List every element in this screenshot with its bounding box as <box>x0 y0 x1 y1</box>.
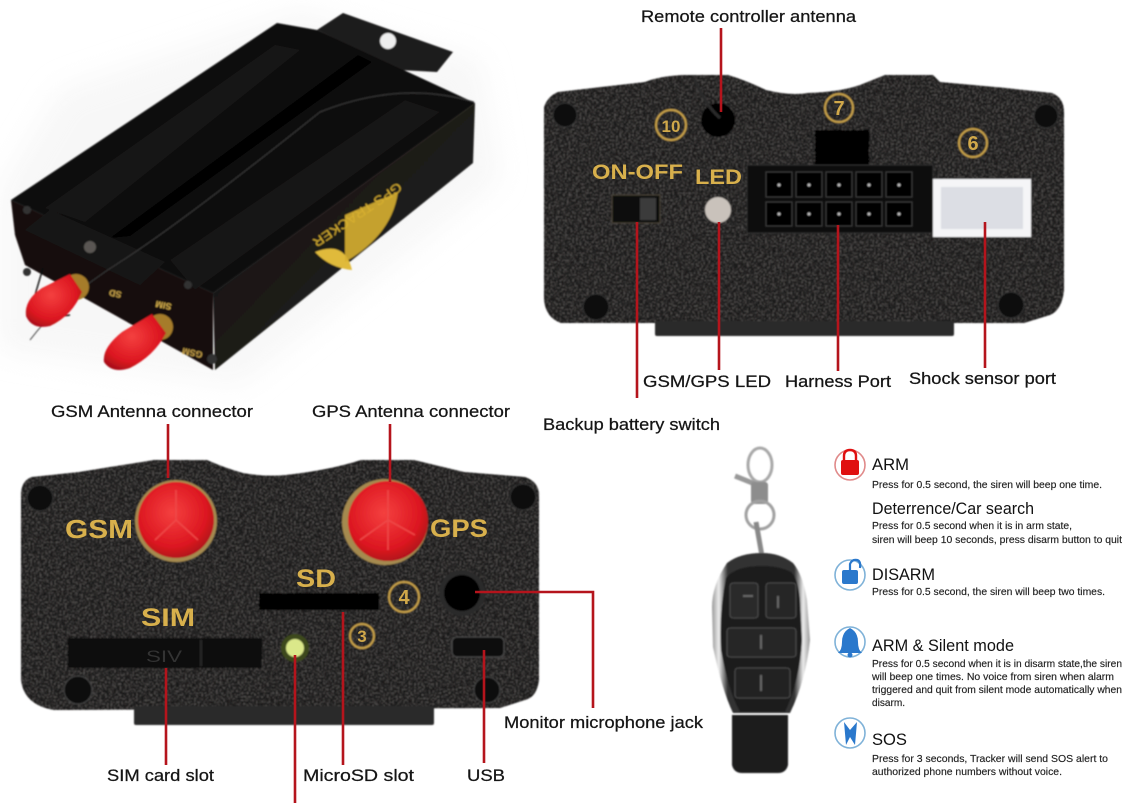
legend: Deterrence/Car search: siren will beep 10 seconds, press disarm button to quit <box>872 535 1122 546</box>
legend: DISARM: DISARM <box>872 566 935 584</box>
legend: SOS <box>835 718 1108 778</box>
printed labels on rear panel: ON-OFF <box>592 161 683 184</box>
legend: DISARM <box>835 560 1105 598</box>
printed labels on front panel: SIV <box>146 647 183 666</box>
callout: GPS antenna connector: GPS Antenna connector <box>312 403 511 421</box>
panel: rear ports photo <box>544 75 1064 336</box>
icon: blue open padlock <box>835 560 865 590</box>
legend: ARM and Silent mode <box>835 627 1122 709</box>
printed labels on front panel: SIM <box>141 604 195 632</box>
printed labels on front panel: SD <box>296 565 336 593</box>
legend: SOS: SOS <box>872 731 907 749</box>
panel: front ports photo <box>21 460 539 725</box>
legend: ARM and Silent mode: ARM & Silent mode <box>872 637 1014 655</box>
icon: blue bell <box>835 627 865 658</box>
icon: red padlock <box>835 450 865 480</box>
callout: shock sensor port: Shock sensor port <box>909 370 1056 388</box>
legend: Deterrence/Car search: Press for 0.5 second when it is in arm state, <box>872 521 1072 532</box>
legend: ARM: ARM <box>872 456 909 474</box>
number badges: 7 <box>833 98 845 120</box>
printed labels on front panel: GSM <box>65 514 133 544</box>
legend: Deterrence/Car search <box>872 500 1122 546</box>
photo: GPS tracker device: SD <box>108 287 122 300</box>
callout: harness port: Harness Port <box>785 373 891 391</box>
callout: USB <box>467 650 505 785</box>
legend: SOS: authorized phone numbers without voice. <box>872 767 1062 778</box>
icon: blue SOS bolt <box>835 718 865 748</box>
remote key fob <box>712 448 810 773</box>
legend: SOS: Press for 3 seconds, Tracker will send SOS alert to <box>872 754 1108 765</box>
legend: ARM and Silent mode: Press for 0.5 second when it is in disarm state,the siren <box>872 659 1122 670</box>
printed labels on rear panel <box>592 161 742 189</box>
printed labels on front panel: 4 <box>398 587 410 609</box>
photo: GPS tracker device: GPS TRACKER <box>310 180 405 250</box>
legend: DISARM: Press for 0.5 second, the siren will beep two times. <box>872 587 1105 598</box>
printed labels on rear panel: LED <box>695 166 742 189</box>
callout: SIM card slot: SIM card slot <box>107 767 214 785</box>
printed labels on front panel: 3 <box>357 627 367 646</box>
legend: ARM and Silent mode: triggered and quit from silent mode automatically when <box>872 685 1122 696</box>
callout: monitor microphone jack <box>475 592 704 732</box>
photo: GPS tracker device <box>0 10 500 385</box>
callout: GSM/GPS LED: GSM/GPS LED <box>643 373 771 391</box>
printed labels on front panel: GPS <box>430 515 488 543</box>
legend: ARM and Silent mode: disarm. <box>872 698 905 709</box>
callout: GSM antenna connector: GSM Antenna connector <box>51 403 254 421</box>
photo: GPS tracker device: SIM <box>155 299 172 312</box>
legend: ARM <box>835 450 1102 491</box>
callout: SIM card slot <box>107 668 214 785</box>
callout: USB: USB <box>467 767 505 785</box>
number badges <box>662 98 979 155</box>
callout: MicroSD slot: MicroSD slot <box>303 767 414 785</box>
photo: GPS tracker device: GSM <box>181 346 203 360</box>
callout: backup battery switch: Backup battery switch <box>543 416 720 434</box>
printed labels on front panel <box>65 514 488 666</box>
callout: status LED leader <box>294 655 296 803</box>
callout: monitor microphone jack: Monitor microphone jack <box>504 714 704 732</box>
callout: remote controller antenna: Remote controller antenna <box>641 8 857 26</box>
legend: ARM and Silent mode: will beep one times. No voice from siren when alarm <box>871 672 1114 683</box>
number badges: 10 <box>662 117 680 136</box>
legend: ARM: Press for 0.5 second, the siren will beep one time. <box>872 480 1102 491</box>
number badges: 6 <box>967 133 979 155</box>
legend: Deterrence/Car search: Deterrence/Car search <box>872 500 1034 518</box>
